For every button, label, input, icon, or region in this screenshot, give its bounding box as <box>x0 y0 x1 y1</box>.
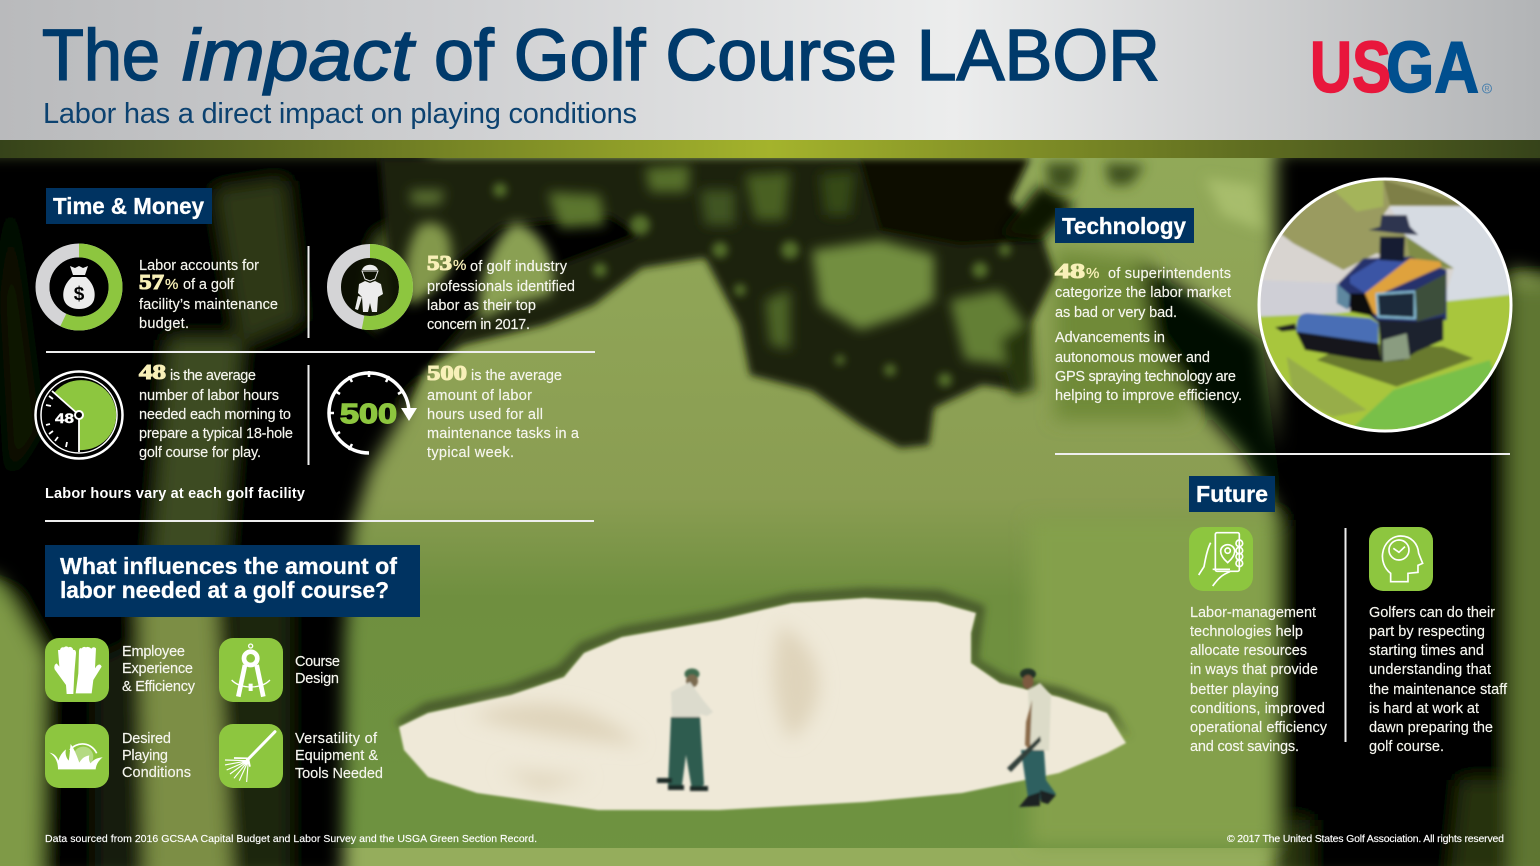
text: 57 percent: budget. <box>139 316 189 332</box>
bunker <box>396 588 1130 810</box>
icon: phone in hand <box>1189 527 1253 591</box>
icon: rake <box>219 724 283 788</box>
text: advancements <box>1055 330 1242 404</box>
label: course design <box>295 654 340 687</box>
text: 48 percent superintendents: 48 <box>1055 259 1085 283</box>
text: 57 percent: 57 <box>139 270 164 294</box>
olive accent bar <box>0 140 1540 158</box>
icon: golf course worker <box>355 265 383 312</box>
title: impact <box>182 16 416 96</box>
heading: future <box>1189 476 1275 512</box>
timer icon: 500 hours: 500 <box>340 398 397 429</box>
icon: drafting compass <box>219 638 283 702</box>
text: 53 percent: professionals identified <box>427 279 575 295</box>
label: employee experience: Experience <box>122 661 193 677</box>
text: golfers can do their part: part by respecting <box>1369 624 1485 640</box>
label: versatility: Versatility of <box>295 731 378 747</box>
USGA logo: US <box>1310 28 1391 108</box>
clock icon: 48 hours: 48 <box>55 410 74 426</box>
text: advancements: helping to improve efficiency. <box>1055 388 1242 404</box>
text: labor-management technologies: better playing <box>1190 682 1279 698</box>
divider vertical <box>1344 528 1346 742</box>
USGA logo <box>1310 28 1492 108</box>
text: 500 hours: maintenance tasks in a <box>427 426 580 442</box>
heading: time and money: Time & Money <box>53 193 204 219</box>
photo: autonomous mower <box>1258 178 1512 432</box>
heading: technology <box>1055 208 1194 243</box>
text: 48 percent superintendents: categorize the labor market <box>1055 285 1231 301</box>
text: 48 hours: needed each morning to <box>139 407 291 423</box>
label: desired conditions: Desired <box>122 731 171 747</box>
text: labor-management technologies: in ways that provide <box>1190 662 1318 678</box>
label: desired conditions: Playing <box>122 748 168 764</box>
note: labor hours vary: Labor hours vary at each golf facility <box>45 486 305 502</box>
title: of Golf Course LABOR <box>434 16 1160 96</box>
text: advancements: Advancements in <box>1055 330 1165 346</box>
text: labor-management technologies: conditions, improved <box>1190 701 1325 717</box>
panel: future <box>1189 476 1508 755</box>
divider vertical <box>308 246 310 338</box>
label: course design: Design <box>295 671 339 687</box>
text: 53 percent <box>427 251 575 333</box>
text: 57 percent: % <box>165 276 178 293</box>
text: 53 percent: labor as their top <box>427 298 536 314</box>
text: golfers can do their part: understanding that <box>1369 662 1491 678</box>
label: versatility: Equipment & <box>295 748 378 764</box>
text: 500 hours: typical week. <box>427 445 514 461</box>
heading: what influences <box>45 545 420 617</box>
label: employee experience: Employee <box>122 644 185 660</box>
text: labor-management technologies: operational efficiency <box>1190 720 1328 736</box>
text: advancements: GPS spraying technology are <box>1055 369 1236 385</box>
text: 500 hours: hours used for all <box>427 407 543 423</box>
text: 48 hours: 48 <box>139 360 166 384</box>
heading: time and money <box>46 188 212 224</box>
USGA logo: GA <box>1386 28 1479 108</box>
text: 53 percent: 53 <box>427 251 452 275</box>
heading: what influences: What influences the amount of <box>60 553 397 579</box>
title: The <box>42 16 160 96</box>
text: advancements: autonomous mower and <box>1055 350 1210 366</box>
text: labor-management technologies: Labor-management <box>1190 605 1316 621</box>
footer: data source: Data sourced from 2016 GCSAA Capital Budget and Labor Survey and the USGA Green Section Record. <box>45 833 537 845</box>
text: 500 hours: is the average <box>471 368 562 384</box>
text: golfers can do their part: the maintenance staff <box>1369 682 1508 698</box>
text: 500 hours: amount of labor <box>427 388 532 404</box>
clock icon: 48 hours <box>36 372 122 458</box>
label: desired conditions: Conditions <box>122 765 191 781</box>
divider vertical <box>308 365 310 465</box>
icon: gloves <box>45 638 109 702</box>
text: labor-management technologies: technologies help <box>1190 624 1303 640</box>
text: 500 hours: 500 <box>427 361 467 385</box>
text: 48 hours: prepare a typical 18-hole <box>139 426 293 442</box>
text: 53 percent: concern in 2017. <box>427 317 530 333</box>
header background <box>0 0 1540 140</box>
label: versatility: Tools Needed <box>295 766 383 782</box>
panel: time and money <box>36 188 580 502</box>
label: desired conditions <box>122 731 191 781</box>
text: 57 percent: of a golf <box>183 277 235 293</box>
timer icon: 500 hours <box>328 371 417 453</box>
label: course design: Course <box>295 654 340 670</box>
text: labor-management technologies: allocate resources <box>1190 643 1307 659</box>
text: golfers can do their part <box>1369 605 1508 755</box>
text: 48 hours: is the average <box>170 368 256 384</box>
heading: technology: Technology <box>1062 213 1186 239</box>
text: 500 hours <box>427 361 580 461</box>
donut chart: 57 percent: $ <box>74 284 85 305</box>
donut chart: 57 percent <box>42 250 116 324</box>
donut chart: 53 percent <box>334 251 406 323</box>
worker figure right <box>1007 668 1056 807</box>
text: 48 percent superintendents <box>1055 259 1231 321</box>
text: golfers can do their part: starting times and <box>1369 643 1484 659</box>
panel: what influences labor <box>45 545 420 788</box>
footer: copyright: © 2017 The United States Golf Association. All rights reserved <box>1227 833 1504 845</box>
text: golfers can do their part: is hard at work at <box>1369 701 1479 717</box>
label: employee experience: & Efficiency <box>122 679 196 695</box>
text: golfers can do their part: golf course. <box>1369 739 1444 755</box>
subtitle: Labor has a direct impact on playing conditions <box>43 98 637 130</box>
USGA logo: R <box>1484 86 1490 93</box>
text: 48 hours: golf course for play. <box>139 445 261 461</box>
text: 48 hours <box>139 360 293 461</box>
text: 48 percent superintendents: as bad or very bad. <box>1055 305 1177 321</box>
panel: technology <box>1055 170 1520 440</box>
text: 48 hours: number of labor hours <box>139 388 279 404</box>
text: golfers can do their part: dawn preparing the <box>1369 720 1493 736</box>
title <box>42 16 1160 96</box>
icon: head with clock <box>1369 527 1433 591</box>
text: labor-management technologies: and cost savings. <box>1190 739 1299 755</box>
icon: grass and golf ball <box>45 724 109 788</box>
label: versatility <box>295 731 383 782</box>
label: employee experience <box>122 644 196 695</box>
text: 57 percent: Labor accounts for <box>139 258 259 274</box>
golfer figure left <box>657 668 713 791</box>
text: 48 percent superintendents: of superintendents <box>1108 266 1231 282</box>
text: 53 percent: % <box>453 257 466 274</box>
heading: future: Future <box>1196 481 1268 507</box>
heading: what influences: labor needed at a golf course? <box>60 577 389 603</box>
text: 57 percent: facility’s maintenance <box>139 297 278 313</box>
text: labor-management technologies <box>1190 605 1328 755</box>
text: 57 percent <box>139 258 278 332</box>
text: golfers can do their part: Golfers can do their <box>1369 605 1495 621</box>
text: 53 percent: of golf industry <box>470 259 568 275</box>
text: 48 percent superintendents: % <box>1086 265 1099 282</box>
